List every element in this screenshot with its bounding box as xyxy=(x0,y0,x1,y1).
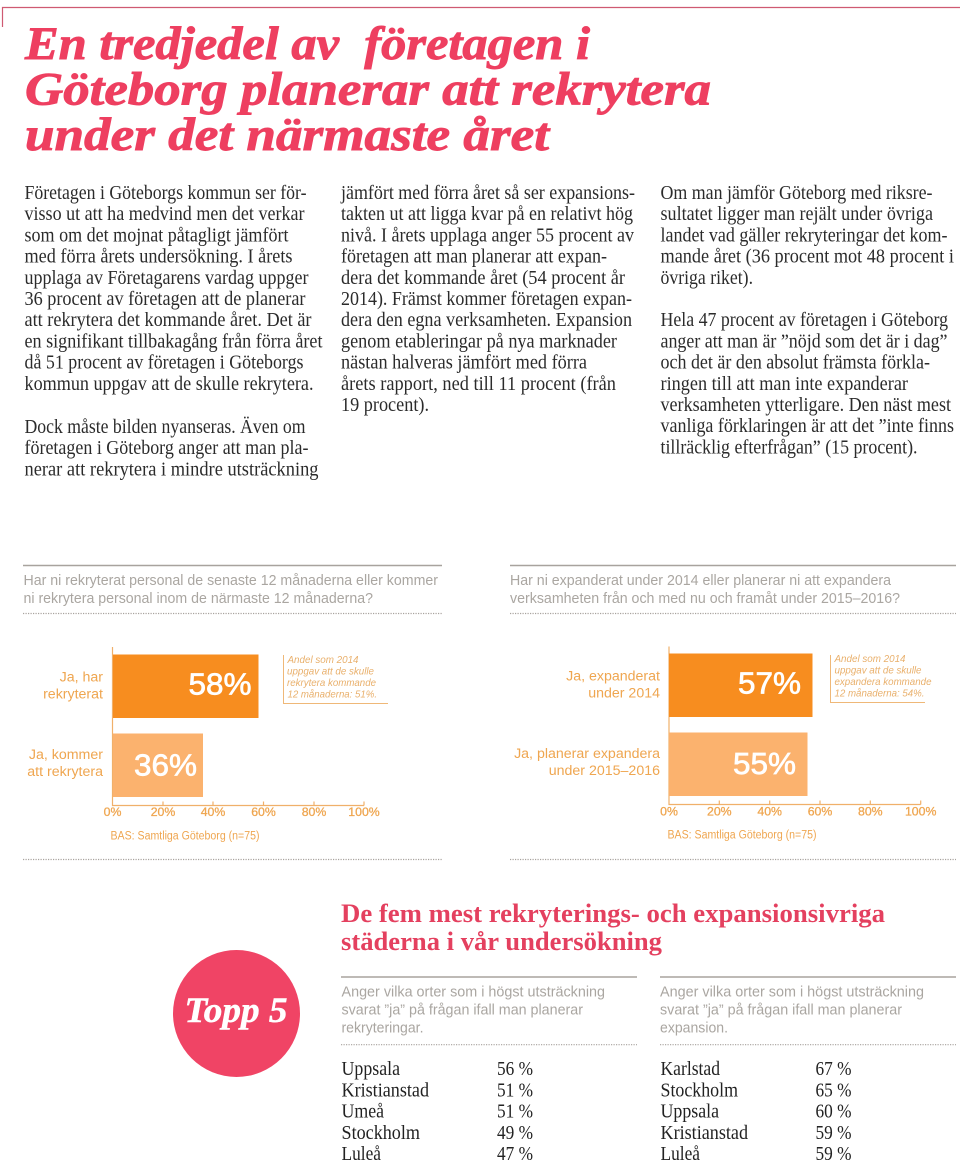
bar chart: expansion: 80% xyxy=(858,804,883,818)
table: expansion cities: 60 % xyxy=(816,1102,852,1123)
description: recruitment list: Anger vilka orter som i högst utsträckning xyxy=(342,985,605,1001)
text block: column 1: 36 procent av företagen att de planerar xyxy=(24,289,306,310)
description: expansion list: Anger vilka orter som i högst utsträckning xyxy=(660,985,924,1001)
bar chart: recruitment: 60% xyxy=(251,805,276,819)
bar chart: recruitment: att rekrytera xyxy=(27,764,103,780)
callout: expansion 2014: expandera kommande xyxy=(834,677,932,688)
text block: column 2: 19 procent). xyxy=(341,395,429,416)
panel: top five recruitment xyxy=(341,977,637,1164)
bar chart: recruitment: BAS: Samtliga Göteborg (n=75) xyxy=(110,830,260,842)
callout: expansion 2014: Andel som 2014 xyxy=(834,654,906,665)
description: expansion list: expansion. xyxy=(660,1021,728,1037)
question heading: recruitment: Har ni rekryterat personal de senaste 12 månaderna eller kommer xyxy=(24,573,438,589)
bar chart: recruitment: Ja, kommer xyxy=(29,747,103,763)
table: recruitment cities: 51 % xyxy=(497,1102,533,1123)
text block: column 1: att rekrytera det kommande året. Det är xyxy=(24,310,312,331)
title: Göteborg planerar att rekrytera xyxy=(25,64,711,116)
text block: column 3 xyxy=(660,183,955,458)
text block: column 3: Om man jämför Göteborg med riksre- xyxy=(660,183,932,204)
callout: recruitment 2014: Andel som 2014 xyxy=(287,655,359,666)
table: recruitment cities: Stockholm xyxy=(342,1123,420,1144)
table: expansion cities: 65 % xyxy=(816,1080,852,1101)
table: recruitment cities xyxy=(342,1059,533,1164)
bar chart: expansion: 0% xyxy=(660,804,678,818)
heading: top five cities: De fem mest rekryterings- och expansionsivriga xyxy=(341,899,885,928)
table: recruitment cities: Umeå xyxy=(342,1102,384,1123)
bar chart: expansion: 60% xyxy=(808,804,832,818)
text block: column 2: företagen att man planerar att expan- xyxy=(341,247,607,268)
text block: column 1: nerar att rekrytera i mindre utsträckning xyxy=(24,459,319,480)
text block: column 1: visso ut att ha medvind men det verkar xyxy=(24,204,305,225)
title: En tredjedel av företagen i xyxy=(24,18,590,70)
table: recruitment cities: 51 % xyxy=(497,1080,533,1101)
text block: column 3: och det är den absolut främsta förkla- xyxy=(660,353,930,374)
table: expansion cities xyxy=(660,1059,852,1164)
text block: column 1: företagen i Göteborg anger att man pla- xyxy=(24,438,308,459)
text block: column 3: tillräcklig efterfrågan” (15 procent). xyxy=(660,437,918,458)
panel: top five expansion xyxy=(660,977,956,1164)
bar chart: expansion: under 2014 xyxy=(588,686,660,702)
text block: column 2: jämfört med förra året så ser expansions- xyxy=(340,183,635,204)
bar chart: recruitment: 0% xyxy=(104,805,121,819)
bar chart: recruitment: 20% xyxy=(151,805,175,819)
heading: top five cities: städerna i vår undersökning xyxy=(341,927,662,956)
question heading: recruitment xyxy=(23,566,442,614)
bar chart: recruitment: Ja, har xyxy=(60,670,103,686)
bar chart: expansion: under 2015–2016 xyxy=(549,763,660,779)
description: expansion list xyxy=(660,985,924,1037)
text block: column 2: nästan halveras jämfört med förra xyxy=(341,353,587,374)
bar chart: expansion xyxy=(514,646,936,842)
bar chart: expansion: 100% xyxy=(905,804,936,818)
text block: column 1: som om det mojnat påtagligt jämfört xyxy=(24,225,289,246)
table: expansion cities: 59 % xyxy=(816,1123,852,1144)
panel: recruitment chart xyxy=(23,566,442,860)
table: recruitment cities: Uppsala xyxy=(342,1059,400,1080)
text block: column 2: årets rapport, ned till 11 procent (från xyxy=(341,374,616,395)
panel: expansion chart xyxy=(510,566,956,860)
table: recruitment cities: 49 % xyxy=(497,1123,533,1144)
bar chart: recruitment: 40% xyxy=(201,805,225,819)
description: recruitment list: rekryteringar. xyxy=(342,1021,424,1037)
bar chart: recruitment: 58% xyxy=(188,666,252,702)
description: expansion list: svarat ”ja” på frågan ifall man planerar xyxy=(660,1003,902,1019)
text block: column 2: dera den egna verksamheten. Expansion xyxy=(341,310,632,331)
callout: recruitment 2014: rekrytera kommande xyxy=(287,678,376,689)
text block: column 2: 2014). Främst kommer företagen expan- xyxy=(341,289,632,310)
bar chart: recruitment xyxy=(27,647,380,842)
table: expansion cities: Stockholm xyxy=(660,1080,738,1101)
text block: column 2: dera det kommande året (54 procent år xyxy=(341,268,625,289)
callout: recruitment 2014 xyxy=(284,655,388,704)
text block: column 1: med förra årets undersökning. I årets xyxy=(24,247,292,268)
text block: column 3: ringen till att man inte expanderar xyxy=(660,374,908,395)
text block: column 1: Dock måste bilden nyanseras. Även om xyxy=(24,417,306,438)
question heading: expansion: verksamheten från och med nu och framåt under 2015–2016? xyxy=(510,591,900,607)
text block: column 1: en signifikant tillbakagång från förra året xyxy=(24,331,323,352)
table: recruitment cities: Kristianstad xyxy=(342,1080,429,1101)
bar chart: expansion: 20% xyxy=(707,804,732,818)
text block: column 1 xyxy=(24,183,323,480)
text block: column 3: sultatet ligger man rejält under övriga xyxy=(660,204,933,225)
text block: column 1: Företagen i Göteborgs kommun ser för- xyxy=(24,183,306,204)
text block: column 2: nivå. I årets upplaga anger 55 procent av xyxy=(341,225,634,246)
bar chart: expansion: Ja, planerar expandera xyxy=(514,746,660,762)
bar chart: recruitment: rekryterat xyxy=(43,687,103,703)
title xyxy=(24,18,711,161)
callout: recruitment 2014: 12 månaderna: 51%. xyxy=(288,688,377,700)
table: expansion cities: 67 % xyxy=(816,1059,852,1080)
question heading: expansion: Har ni expanderat under 2014 eller planerar ni att expandera xyxy=(510,573,891,589)
callout: recruitment 2014: uppgav att de skulle xyxy=(287,666,374,678)
text block: column 1: kommun uppgav att de skulle rekrytera. xyxy=(24,374,314,395)
heading: top five cities xyxy=(341,899,885,956)
bar chart: expansion: 55% xyxy=(733,746,796,781)
bar chart: recruitment: 80% xyxy=(302,805,326,819)
callout: expansion 2014: uppgav att de skulle xyxy=(834,666,922,676)
question heading: expansion xyxy=(510,566,956,614)
table: expansion cities: Uppsala xyxy=(660,1102,719,1123)
text block: column 1: upplaga av Företagarens vardag uppger xyxy=(24,268,309,289)
bar chart: recruitment: 36% xyxy=(134,748,197,782)
text block: column 1: då 51 procent av företagen i Göteborgs xyxy=(24,353,304,374)
bar chart: expansion: 40% xyxy=(757,804,782,818)
bar chart: expansion: Ja, expanderat xyxy=(566,669,660,685)
text block: column 3: övriga riket). xyxy=(660,268,753,289)
description: recruitment list: svarat ”ja” på frågan ifall man planerar xyxy=(342,1003,583,1019)
text block: column 2: genom etableringar på nya marknader xyxy=(341,331,617,352)
title: under det närmaste året xyxy=(25,109,551,161)
text block: column 2: takten ut att ligga kvar på en relativt hög xyxy=(341,204,633,225)
badge: Topp 5 xyxy=(173,950,300,1077)
callout: expansion 2014 xyxy=(830,654,932,702)
question heading: recruitment: ni rekrytera personal inom de närmaste 12 månaderna? xyxy=(24,591,373,607)
table: expansion cities: Karlstad xyxy=(660,1059,720,1080)
description: recruitment list xyxy=(342,985,605,1037)
bar chart: expansion: BAS: Samtliga Göteborg (n=75) xyxy=(668,830,817,842)
bar chart: expansion: 57% xyxy=(738,666,801,700)
text block: column 2 xyxy=(340,183,635,416)
callout: expansion 2014: 12 månaderna: 54%. xyxy=(834,688,924,700)
table: recruitment cities: 56 % xyxy=(497,1059,533,1080)
badge: Topp 5: Topp 5 xyxy=(184,990,288,1030)
table: expansion cities: Kristianstad xyxy=(660,1123,748,1144)
bar chart: recruitment: 100% xyxy=(348,805,380,819)
